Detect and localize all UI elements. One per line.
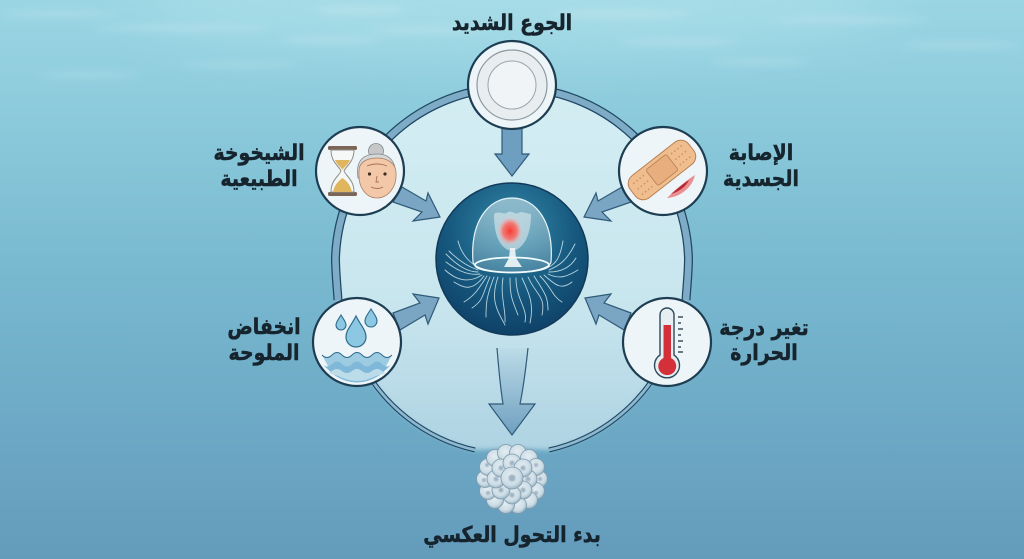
label: extreme hunger: الجوع الشديد <box>452 10 572 35</box>
arrow: injury to jellyfish <box>584 187 631 221</box>
icon: bandage and wound <box>619 127 707 215</box>
label: natural aging: الطبيعية <box>220 166 298 191</box>
icon: hourglass and elderly face <box>316 127 404 215</box>
label: physical injury: الإصابة <box>729 140 793 165</box>
label: lower salinity: الملوحة <box>229 340 299 365</box>
arrow: aging to jellyfish <box>393 187 440 221</box>
arrow: temperature to jellyfish <box>585 294 631 330</box>
label: temperature change: الحرارة <box>730 340 798 365</box>
label: natural aging <box>213 140 305 191</box>
hourglass <box>328 146 357 196</box>
icon: thermometer <box>623 298 711 386</box>
icon: cell cluster <box>476 444 548 514</box>
central jellyfish circle <box>436 183 588 335</box>
elderly face <box>357 144 396 198</box>
ring cycle <box>336 87 688 450</box>
label: temperature change <box>719 315 809 365</box>
label: lower salinity <box>227 314 301 365</box>
arrow: hunger to jellyfish <box>495 128 529 176</box>
label: start of reverse development: بدء التحول العكسي <box>423 522 601 547</box>
label: lower salinity: انخفاض <box>227 314 301 339</box>
label: temperature change: تغير درجة <box>719 315 809 340</box>
arrow: low salinity to jellyfish <box>393 294 439 330</box>
label: physical injury <box>723 140 799 191</box>
icon: water drops and waves <box>313 298 401 386</box>
jellyfish bell <box>473 198 551 272</box>
label: physical injury: الجسدية <box>723 166 799 191</box>
arrow: jellyfish to reverse development <box>489 348 535 435</box>
label: natural aging: الشيخوخة <box>213 140 305 165</box>
icon: empty plate <box>468 41 556 129</box>
jellyfish tentacles <box>445 241 578 325</box>
